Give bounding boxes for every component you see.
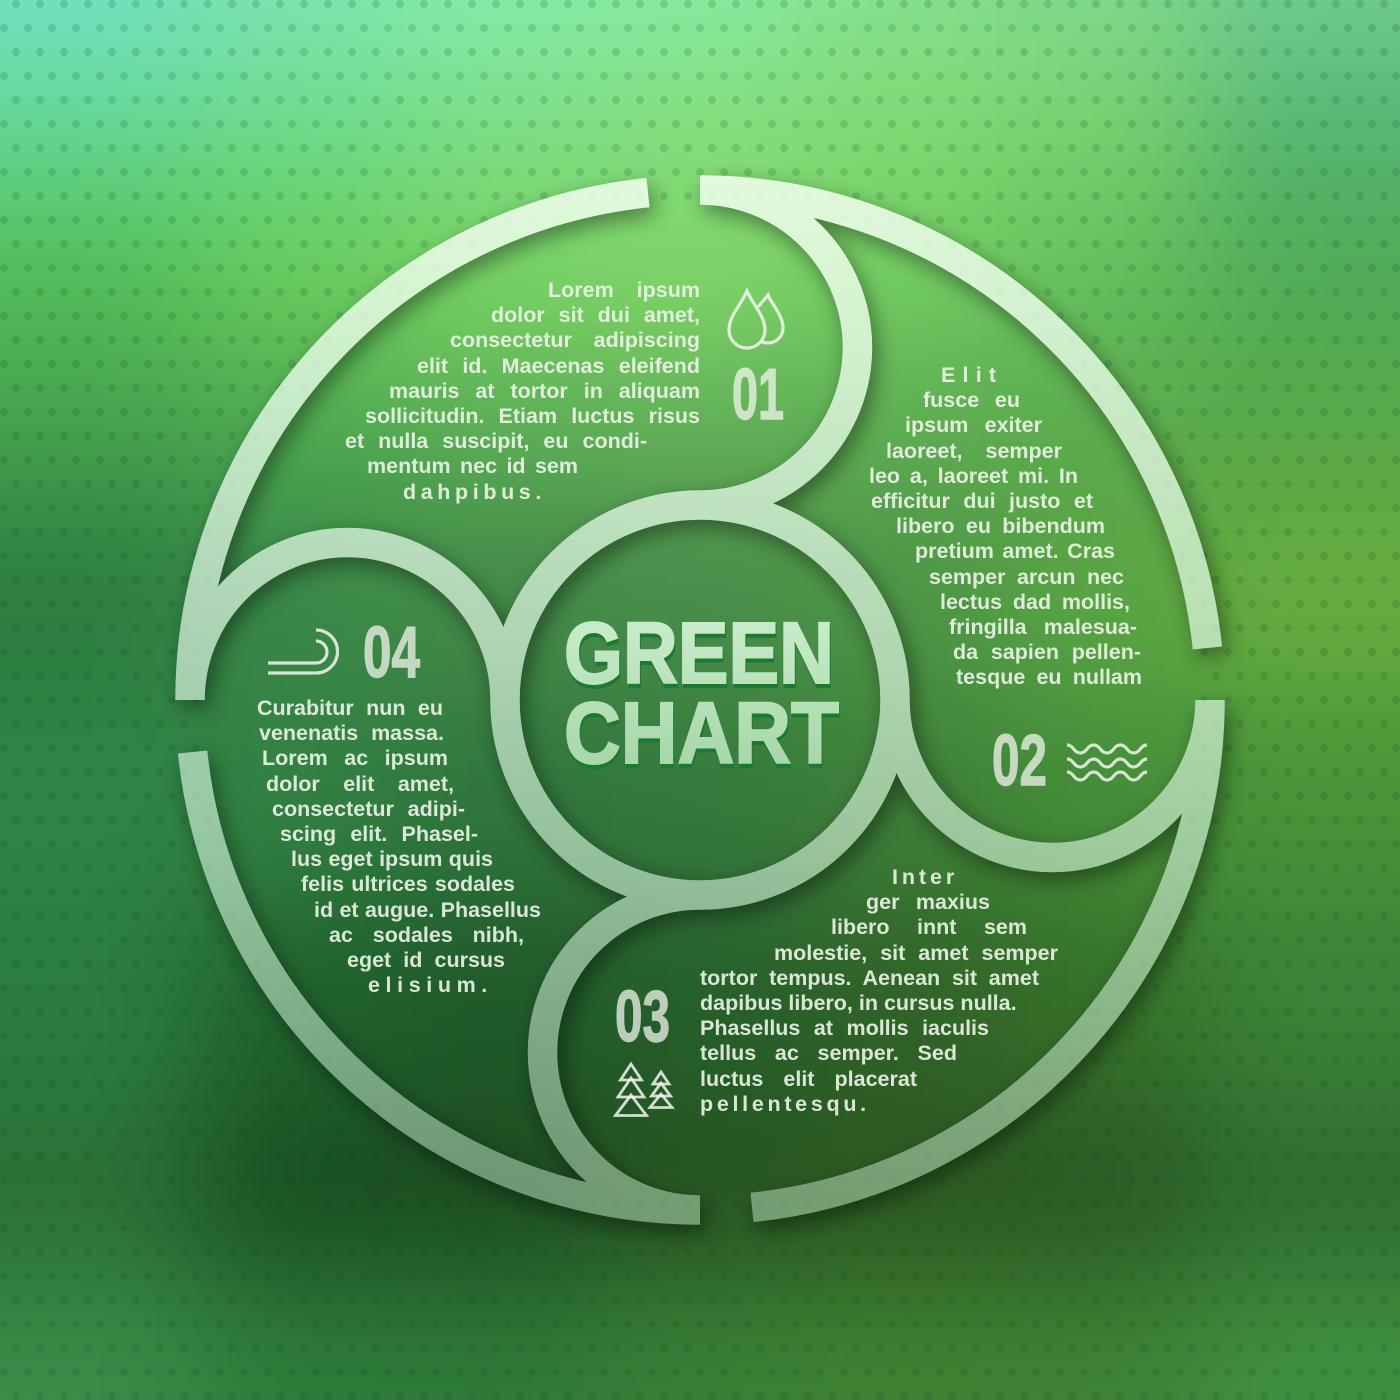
text block 02: libero eu bibendum: [896, 514, 1105, 538]
text block 03: tortor tempus. Aenean sit amet: [700, 966, 1039, 990]
text block 02: efficitur dui justo et: [871, 489, 1093, 513]
text block 02: laoreet, semper: [886, 439, 1062, 463]
text block 03: ger maxius: [866, 890, 990, 914]
text block 03: libero innt sem: [831, 915, 1027, 939]
panel 01: water: [345, 278, 785, 504]
text block 04: ac sodales nibh,: [329, 923, 524, 947]
number 03: 03: [615, 977, 670, 1057]
number 04: 04: [363, 613, 420, 693]
text block 01: mentum nec id sem: [367, 454, 578, 478]
text block 01: [345, 278, 700, 504]
text block 02: fusce eu: [923, 388, 1020, 412]
text block 01: sollicitudin. Etiam luctus risus: [365, 404, 700, 428]
panel 02: river: [869, 363, 1147, 801]
text block 01: dolor sit dui amet,: [491, 303, 700, 327]
text block 04: [257, 696, 541, 997]
text block 02: semper arcun nec: [929, 564, 1124, 588]
title: GREEN CHART: GREEN: [564, 605, 834, 702]
text block 04: venenatis massa.: [259, 721, 444, 745]
text block 01: dahpibus.: [403, 480, 546, 504]
text block 02: Elit: [941, 363, 1003, 387]
text block 04: felis ultrices sodales: [301, 872, 515, 896]
icon: pine trees: [612, 1062, 675, 1117]
text block 03: molestie, sit amet semper: [774, 941, 1058, 965]
text block 04: consectetur adipi-: [272, 797, 465, 821]
text block 03: tellus ac semper. Sed: [700, 1041, 957, 1065]
number 01: 01: [732, 355, 784, 435]
text block 02: fringilla malesua-: [949, 615, 1137, 639]
text block 02: ipsum exiter: [905, 413, 1042, 437]
icon: waves: [1067, 743, 1147, 782]
text block 02: lectus dad mollis,: [940, 590, 1130, 614]
text block 04: lus eget ipsum quis: [291, 847, 493, 871]
panel 04: wind: [257, 613, 541, 997]
text block 01: mauris at tortor in aliquam: [389, 379, 700, 403]
text block 01: Lorem ipsum: [548, 278, 700, 302]
text block 03: [700, 865, 1058, 1116]
text block 04: id et augue. Phasellus: [314, 898, 541, 922]
text block 04: dolor elit amet,: [266, 772, 454, 796]
text block 02: tesque eu nullam: [956, 665, 1142, 689]
text block 04: eget id cursus: [347, 948, 505, 972]
text block 04: Lorem ac ipsum: [262, 746, 448, 770]
icon: water drops: [727, 287, 785, 350]
text block 01: elit id. Maecenas eleifend: [417, 354, 700, 378]
panel 03: forest: [612, 865, 1058, 1117]
text block 03: Phasellus at mollis iaculis: [700, 1016, 989, 1040]
text block 02: pretium amet. Cras: [915, 539, 1115, 563]
text block 04: scing elit. Phasel-: [280, 822, 478, 846]
text block 02: [869, 363, 1142, 689]
text block 02: da sapien pellen-: [953, 640, 1141, 664]
text block 02: leo a, laoreet mi. In: [869, 464, 1078, 488]
text block 03: dapibus libero, in cursus nulla.: [700, 991, 1017, 1015]
number 02: 02: [992, 721, 1047, 801]
text block 03: Inter: [892, 865, 958, 889]
text block 03: pellentesqu.: [700, 1092, 870, 1116]
text block 04: elisium.: [368, 973, 493, 997]
text block 01: consectetur adipiscing: [450, 328, 700, 352]
icon: wind: [268, 628, 340, 675]
text block 04: Curabitur nun eu: [257, 696, 443, 720]
text block 03: luctus elit placerat: [700, 1066, 917, 1090]
title: GREEN CHART: CHART: [564, 685, 839, 782]
text block 01: et nulla suscipit, eu condi-: [345, 429, 647, 453]
